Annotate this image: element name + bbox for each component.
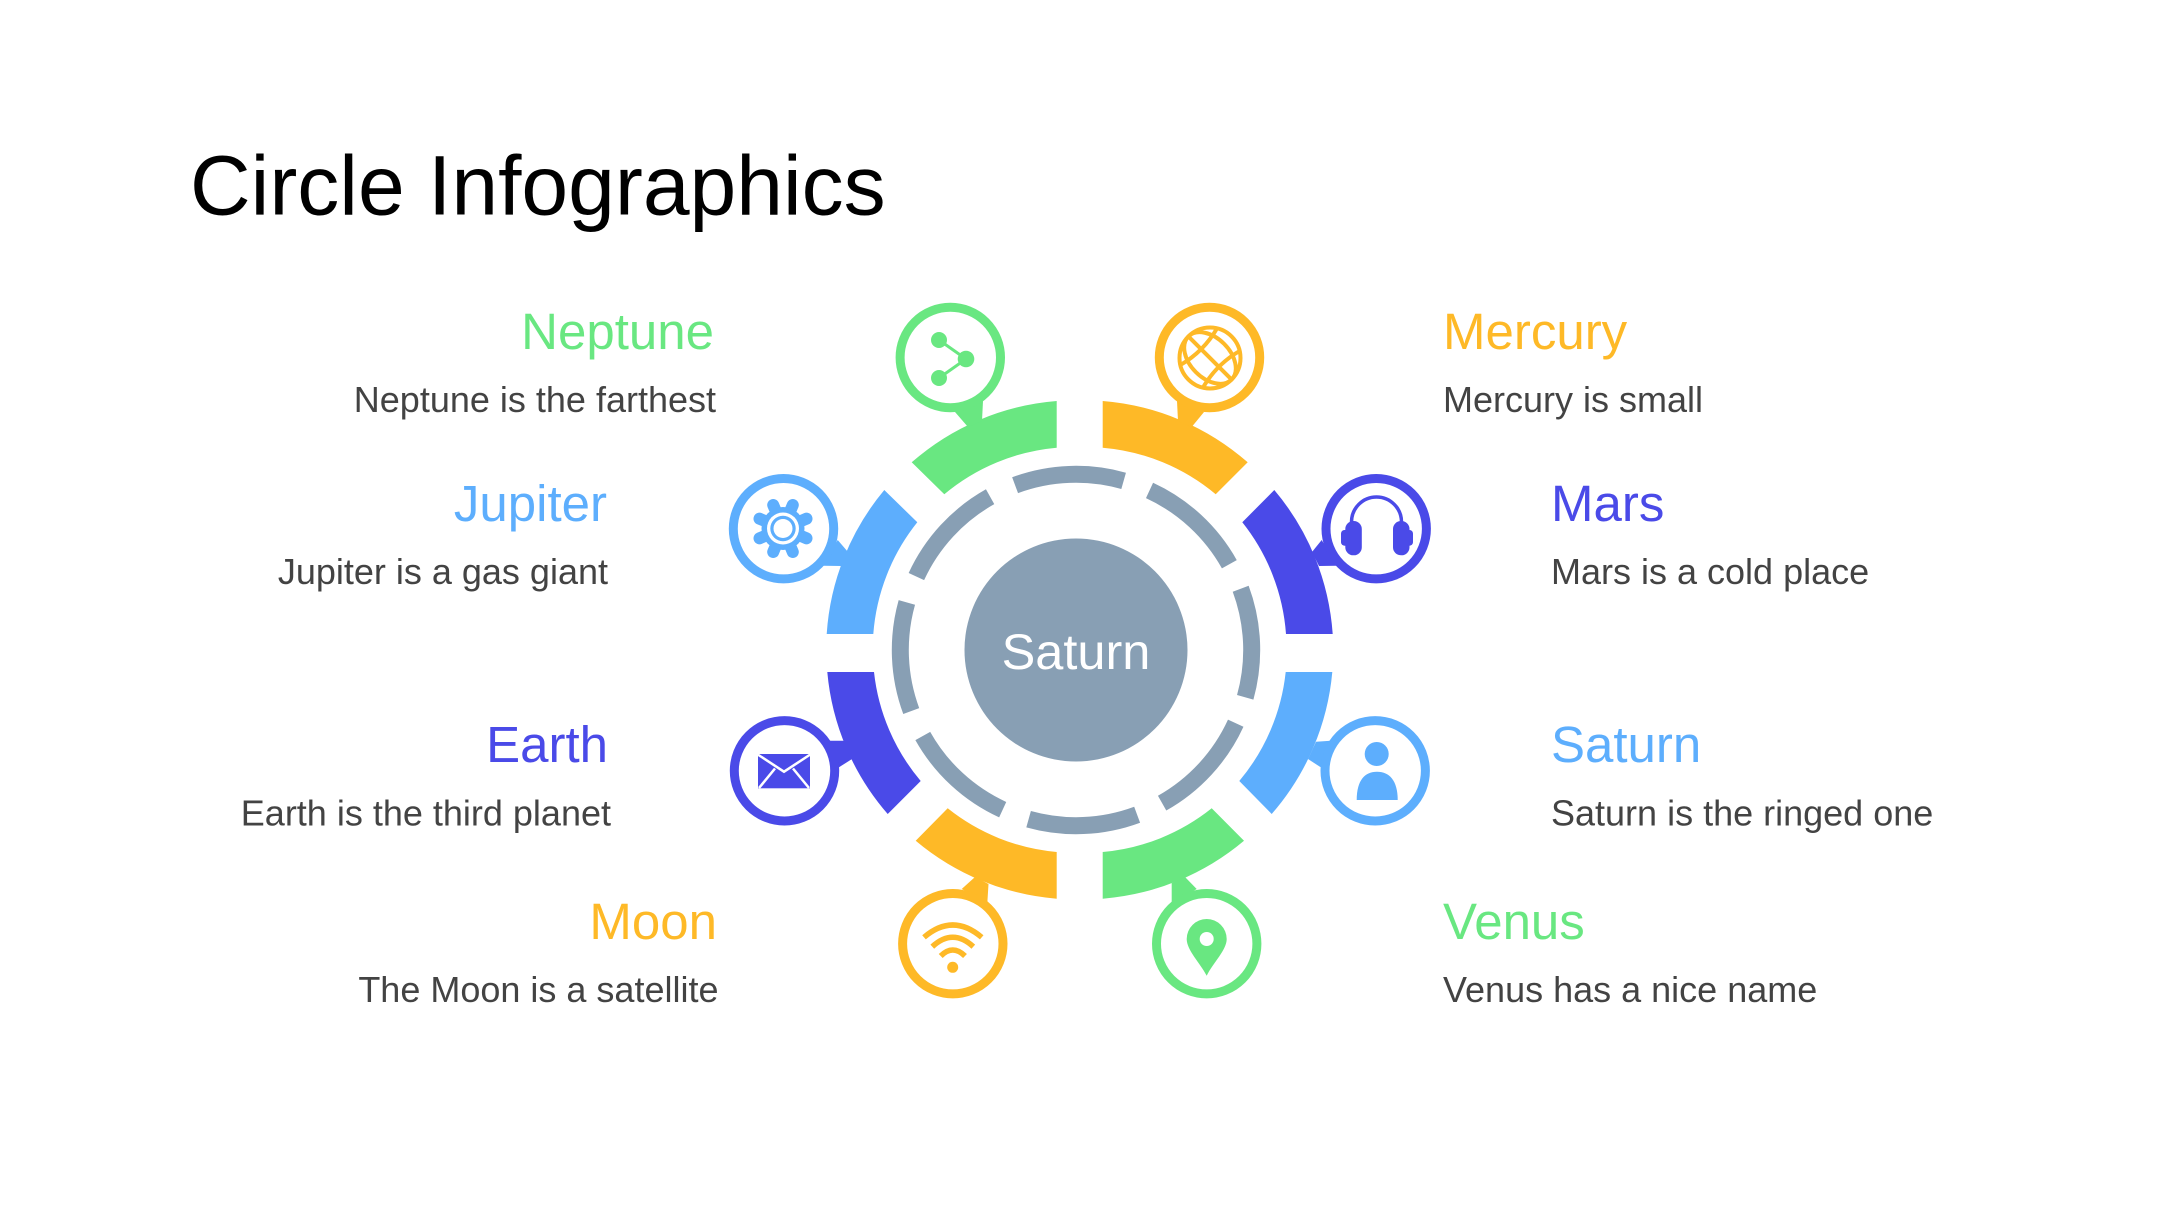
center circle: Saturn — [964, 538, 1188, 762]
label: Mercury: Mercury is small — [1443, 379, 1703, 420]
label: Moon — [358, 893, 718, 1010]
icon: globe — [1167, 315, 1253, 401]
icon: location pin — [1187, 919, 1227, 976]
segment: Earth — [734, 672, 921, 821]
label: Mercury: Mercury — [1443, 303, 1628, 360]
icon: wifi — [924, 925, 982, 973]
segment: Mercury — [1103, 307, 1260, 494]
label: Saturn: Saturn is the ringed one — [1551, 792, 1933, 834]
label: Venus — [1443, 893, 1817, 1010]
label: Jupiter — [278, 475, 608, 592]
label: Venus: Venus has a nice name — [1443, 969, 1817, 1010]
dashed gray ring — [850, 424, 1302, 876]
label: Saturn: Saturn — [1551, 716, 1701, 773]
title: Circle Infographics — [190, 138, 886, 232]
label: Mars — [1551, 475, 1869, 592]
label: Earth: Earth — [486, 716, 608, 773]
label: Earth: Earth is the third planet — [241, 792, 611, 834]
icon: headphones — [1341, 497, 1413, 555]
label: Venus: Venus — [1443, 893, 1585, 950]
icon: person — [1357, 742, 1398, 800]
label: Earth — [241, 716, 611, 834]
label: Mars: Mars — [1551, 475, 1664, 532]
segment: Saturn — [1239, 672, 1425, 821]
icon: envelope — [757, 754, 811, 788]
label: Moon: Moon — [589, 893, 717, 950]
segment: Neptune — [900, 307, 1057, 494]
label: Neptune: Neptune is the farthest — [354, 379, 716, 420]
center circle: Saturn: Saturn — [1002, 623, 1150, 680]
label: Mars: Mars is a cold place — [1551, 551, 1869, 592]
segment: Moon — [903, 808, 1057, 994]
label: Moon: The Moon is a satellite — [358, 969, 718, 1010]
segment: Venus — [1103, 808, 1257, 994]
label: Jupiter: Jupiter is a gas giant — [278, 551, 608, 592]
label: Neptune: Neptune — [521, 303, 714, 360]
icon: gear — [760, 505, 806, 552]
label: Saturn — [1551, 716, 1933, 834]
segment: Jupiter — [733, 478, 917, 634]
icon: share — [931, 332, 974, 386]
label: Neptune — [354, 303, 716, 420]
label: Jupiter: Jupiter — [454, 475, 607, 532]
segment: Mars — [1242, 478, 1426, 634]
label: Mercury — [1443, 303, 1703, 420]
